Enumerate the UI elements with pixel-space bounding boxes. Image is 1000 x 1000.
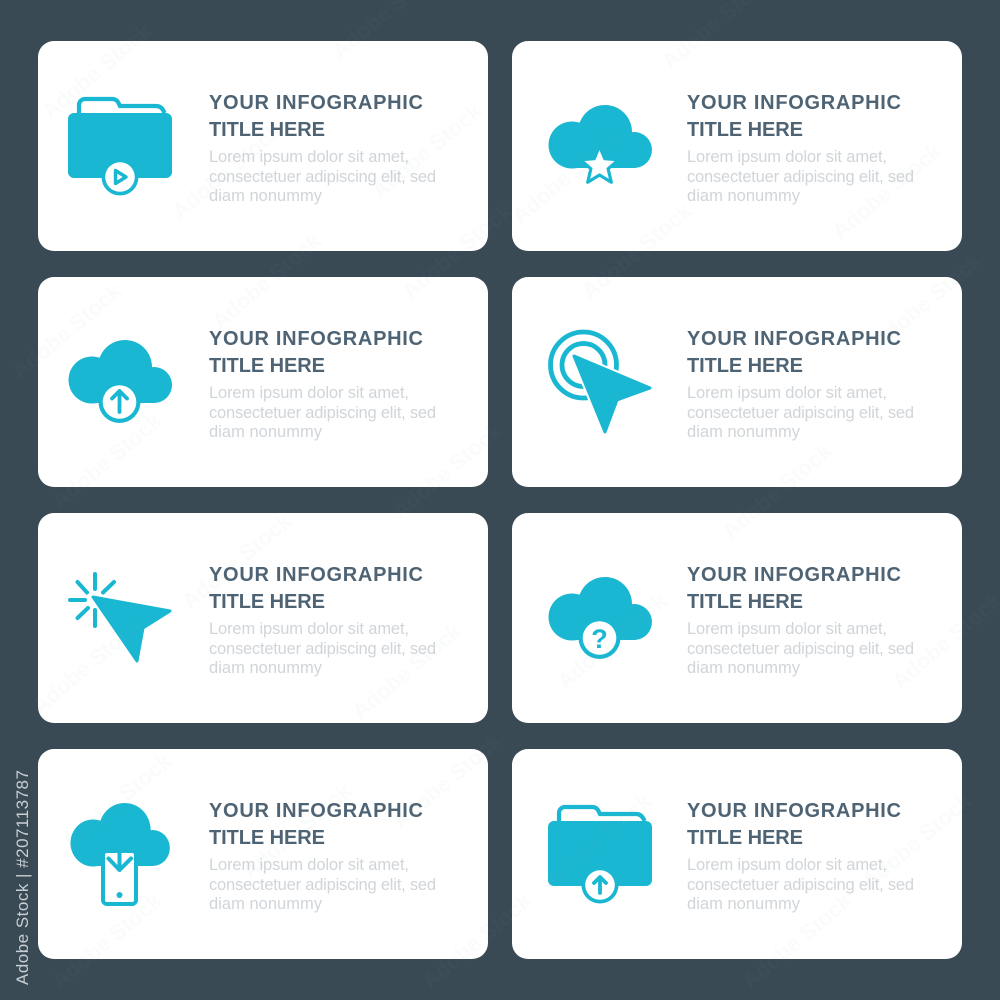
- text block: diam nonummy: [209, 187, 323, 205]
- title: TITLE HERE: [687, 591, 803, 613]
- watermarks: Adobe Stock: [27, 613, 147, 719]
- text block: consectetuer adipiscing elit, sed: [687, 168, 914, 186]
- title: TITLE HERE: [209, 591, 325, 613]
- text block: Lorem ipsum dolor sit amet,: [209, 384, 409, 402]
- watermarks: Adobe Stock: [367, 98, 487, 204]
- watermarks: Adobe Stock: [237, 778, 357, 884]
- text block: Lorem ipsum dolor sit amet,: [687, 620, 887, 638]
- watermarks: Adobe Stock: [717, 438, 837, 544]
- watermarks: Adobe Stock: [737, 888, 857, 994]
- title: YOUR INFOGRAPHIC: [209, 800, 423, 822]
- panel: cloud to phone: [38, 749, 488, 959]
- icon: cloud with question mark: ?: [591, 624, 608, 654]
- watermarks: Adobe Stock: [347, 618, 467, 724]
- title: TITLE HERE: [687, 355, 803, 377]
- text block: consectetuer adipiscing elit, sed: [687, 640, 914, 658]
- title: YOUR INFOGRAPHIC: [687, 328, 901, 350]
- panel: click cursor: [38, 513, 488, 723]
- watermarks: Adobe Stock: [857, 788, 977, 894]
- panel: folder upload: [512, 749, 962, 959]
- title: TITLE HERE: [209, 355, 325, 377]
- text block: consectetuer adipiscing elit, sed: [209, 168, 436, 186]
- icon: cloud with star: [548, 105, 652, 182]
- watermarks: Adobe Stock: [507, 123, 627, 229]
- text block: consectetuer adipiscing elit, sed: [687, 404, 914, 422]
- watermarks: Adobe Stock: [167, 118, 287, 224]
- watermarks: Adobe Stock: [417, 888, 537, 994]
- title: YOUR INFOGRAPHIC: [687, 800, 901, 822]
- title: TITLE HERE: [209, 119, 325, 141]
- watermarks: Adobe Stock: [207, 228, 327, 334]
- icon: folder with play button: [68, 99, 172, 196]
- title: TITLE HERE: [209, 827, 325, 849]
- watermarks: Adobe Stock: [387, 728, 507, 834]
- panel: cloud question: [512, 513, 962, 723]
- text block: diam nonummy: [209, 423, 323, 441]
- text block: consectetuer adipiscing elit, sed: [209, 640, 436, 658]
- title: TITLE HERE: [687, 827, 803, 849]
- text block: diam nonummy: [687, 895, 801, 913]
- text block: Lorem ipsum dolor sit amet,: [209, 148, 409, 166]
- text block: consectetuer adipiscing elit, sed: [209, 404, 436, 422]
- icon: cursor on target rings: [550, 332, 650, 432]
- title: YOUR INFOGRAPHIC: [687, 92, 901, 114]
- watermarks: Adobe Stock: [7, 278, 127, 384]
- watermarks: Adobe Stock: [867, 248, 987, 354]
- watermarks: Adobe Stock: [57, 748, 177, 854]
- icon: cloud download to phone: [70, 803, 170, 904]
- text block: consectetuer adipiscing elit, sed: [687, 876, 914, 894]
- panel: cloud star: [512, 41, 962, 251]
- text block: Lorem ipsum dolor sit amet,: [209, 856, 409, 874]
- watermarks: Adobe Stock: [827, 138, 947, 244]
- stock id label: Adobe Stock | #207113787: [13, 770, 32, 985]
- text block: consectetuer adipiscing elit, sed: [209, 876, 436, 894]
- watermarks: Adobe Stock: [177, 508, 297, 614]
- watermarks: Adobe Stock: [537, 788, 657, 894]
- icon: cloud with question mark: [548, 577, 652, 659]
- text block: Lorem ipsum dolor sit amet,: [687, 148, 887, 166]
- watermarks: Adobe Stock: [47, 888, 167, 994]
- watermarks: Adobe Stock: [397, 198, 517, 304]
- text block: diam nonummy: [209, 895, 323, 913]
- text block: Lorem ipsum dolor sit amet,: [209, 620, 409, 638]
- panel: cloud upload: [38, 277, 488, 487]
- title: TITLE HERE: [687, 119, 803, 141]
- title: YOUR INFOGRAPHIC: [209, 328, 423, 350]
- watermarks: Adobe Stock: [37, 18, 157, 124]
- panel: target cursor: [512, 277, 962, 487]
- text block: diam nonummy: [687, 659, 801, 677]
- text block: Lorem ipsum dolor sit amet,: [687, 384, 887, 402]
- title: YOUR INFOGRAPHIC: [209, 564, 423, 586]
- panel: folder play: [38, 41, 488, 251]
- watermarks: Adobe Stock: [552, 588, 672, 694]
- text block: diam nonummy: [687, 187, 801, 205]
- text block: Lorem ipsum dolor sit amet,: [687, 856, 887, 874]
- watermarks: Adobe Stock: [47, 408, 167, 514]
- title: YOUR INFOGRAPHIC: [687, 564, 901, 586]
- title: YOUR INFOGRAPHIC: [209, 92, 423, 114]
- icon: folder with up arrow: [548, 807, 652, 904]
- watermarks: Adobe Stock: [387, 418, 507, 524]
- watermarks: Adobe Stock: [577, 198, 697, 304]
- icon: cursor with click rays: [70, 574, 170, 661]
- text block: diam nonummy: [687, 423, 801, 441]
- icon: cloud with up arrow: [68, 340, 172, 423]
- text block: diam nonummy: [209, 659, 323, 677]
